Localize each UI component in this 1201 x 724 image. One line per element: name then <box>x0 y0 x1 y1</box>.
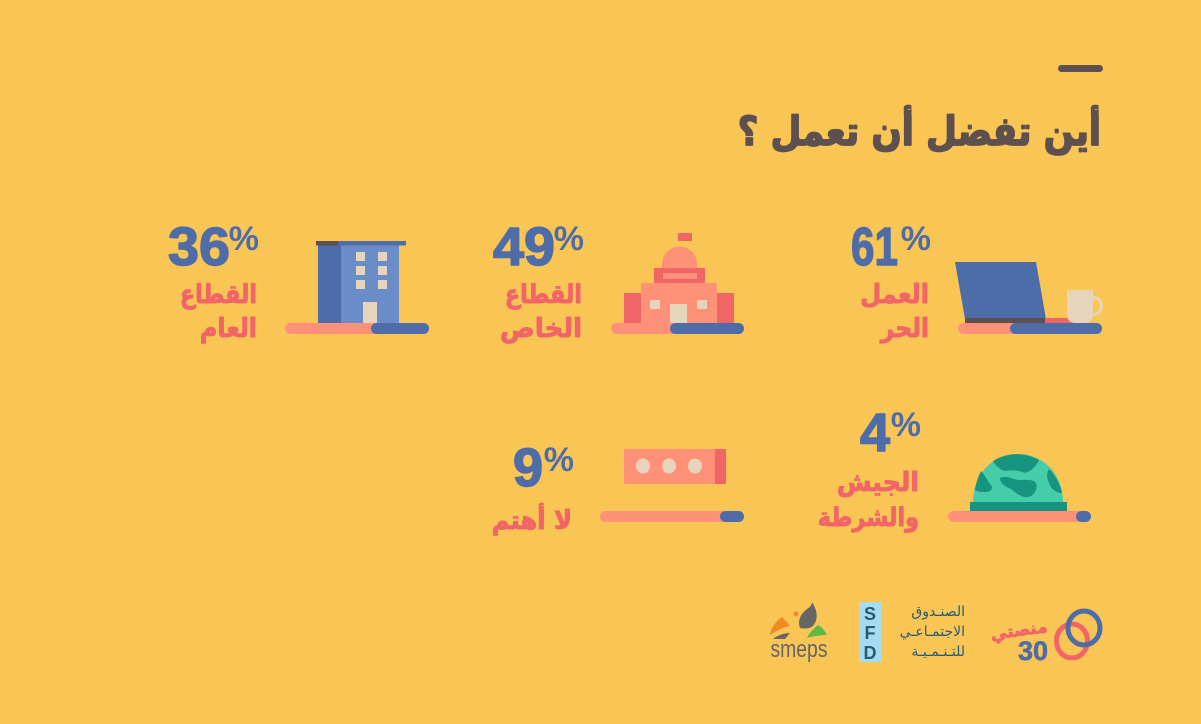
label: private sector <box>500 279 582 344</box>
stat: 4% <box>860 403 921 463</box>
icon: helmet <box>970 454 1067 512</box>
label: army and police <box>818 468 919 532</box>
stat: 61%: % <box>901 220 931 258</box>
label: freelance: الحر <box>879 313 929 343</box>
stat: 36%: % <box>229 220 259 258</box>
stat: 49%: % <box>554 220 584 258</box>
icon: office building <box>316 241 406 324</box>
logo: Social Fund for Development: للتـنـمـيـة <box>911 644 965 660</box>
panel: don't care 9% <box>492 438 744 535</box>
label: don't care: لا أهتم <box>492 503 572 535</box>
stat: 9%: % <box>544 441 574 479</box>
stat: 49%: 49 <box>493 217 555 277</box>
icon: domed building <box>624 233 734 326</box>
label: public sector: القطاع <box>180 279 257 309</box>
label: private sector: الخاص <box>500 314 582 344</box>
stat: 36% <box>168 217 259 277</box>
logo: smeps <box>770 602 828 663</box>
label: army and police: الجيش <box>837 468 919 498</box>
stat: 9%: 9 <box>513 438 543 498</box>
stat: 49% <box>493 217 584 277</box>
progress bar: 36% <box>285 323 429 334</box>
logo: Social Fund for Development <box>859 602 965 663</box>
label: freelance: العمل <box>860 279 929 309</box>
progress bar: 49% <box>611 323 744 334</box>
label: public sector: العام <box>200 313 257 343</box>
panel: public sector 36% <box>168 217 429 343</box>
icon: laptop and mug <box>955 262 1102 324</box>
progress bar: 9% <box>600 511 744 522</box>
panel: freelance 61% <box>851 217 1102 343</box>
logo: smeps: smeps <box>770 636 828 663</box>
logo: Minasati 30: منصتي <box>989 616 1049 645</box>
logo: Minasati 30 <box>989 611 1100 666</box>
label: public sector <box>180 279 257 343</box>
stat: 36%: 36 <box>168 217 230 277</box>
logo: Social Fund for Development: الاجتمـاعـي <box>900 624 965 640</box>
stat: 4%: 4 <box>860 403 890 463</box>
title: أين تفضل أن تعمل ؟ <box>738 105 1101 155</box>
stat: 4%: % <box>891 406 921 444</box>
stat: 9% <box>513 438 574 498</box>
title accent bar <box>1058 65 1103 72</box>
panel: private sector 49% <box>493 217 744 344</box>
stat: 61%: 61 <box>851 217 898 277</box>
logo: Social Fund for Development: F <box>864 623 876 643</box>
panel: army and police 4% <box>818 403 1091 532</box>
icon: ellipsis card <box>624 449 726 484</box>
label: army and police: والشرطة <box>818 501 919 532</box>
logo: Social Fund for Development: S <box>864 604 876 624</box>
progress bar: 61% <box>958 323 1102 334</box>
logo: Minasati 30: 30 <box>1018 636 1048 666</box>
label: freelance <box>860 279 929 343</box>
progress bar: 4% <box>948 511 1091 522</box>
logo: Social Fund for Development: D <box>864 643 876 663</box>
label: private sector: القطاع <box>505 279 582 309</box>
logo: Social Fund for Development: الصنـدوق <box>911 604 965 620</box>
